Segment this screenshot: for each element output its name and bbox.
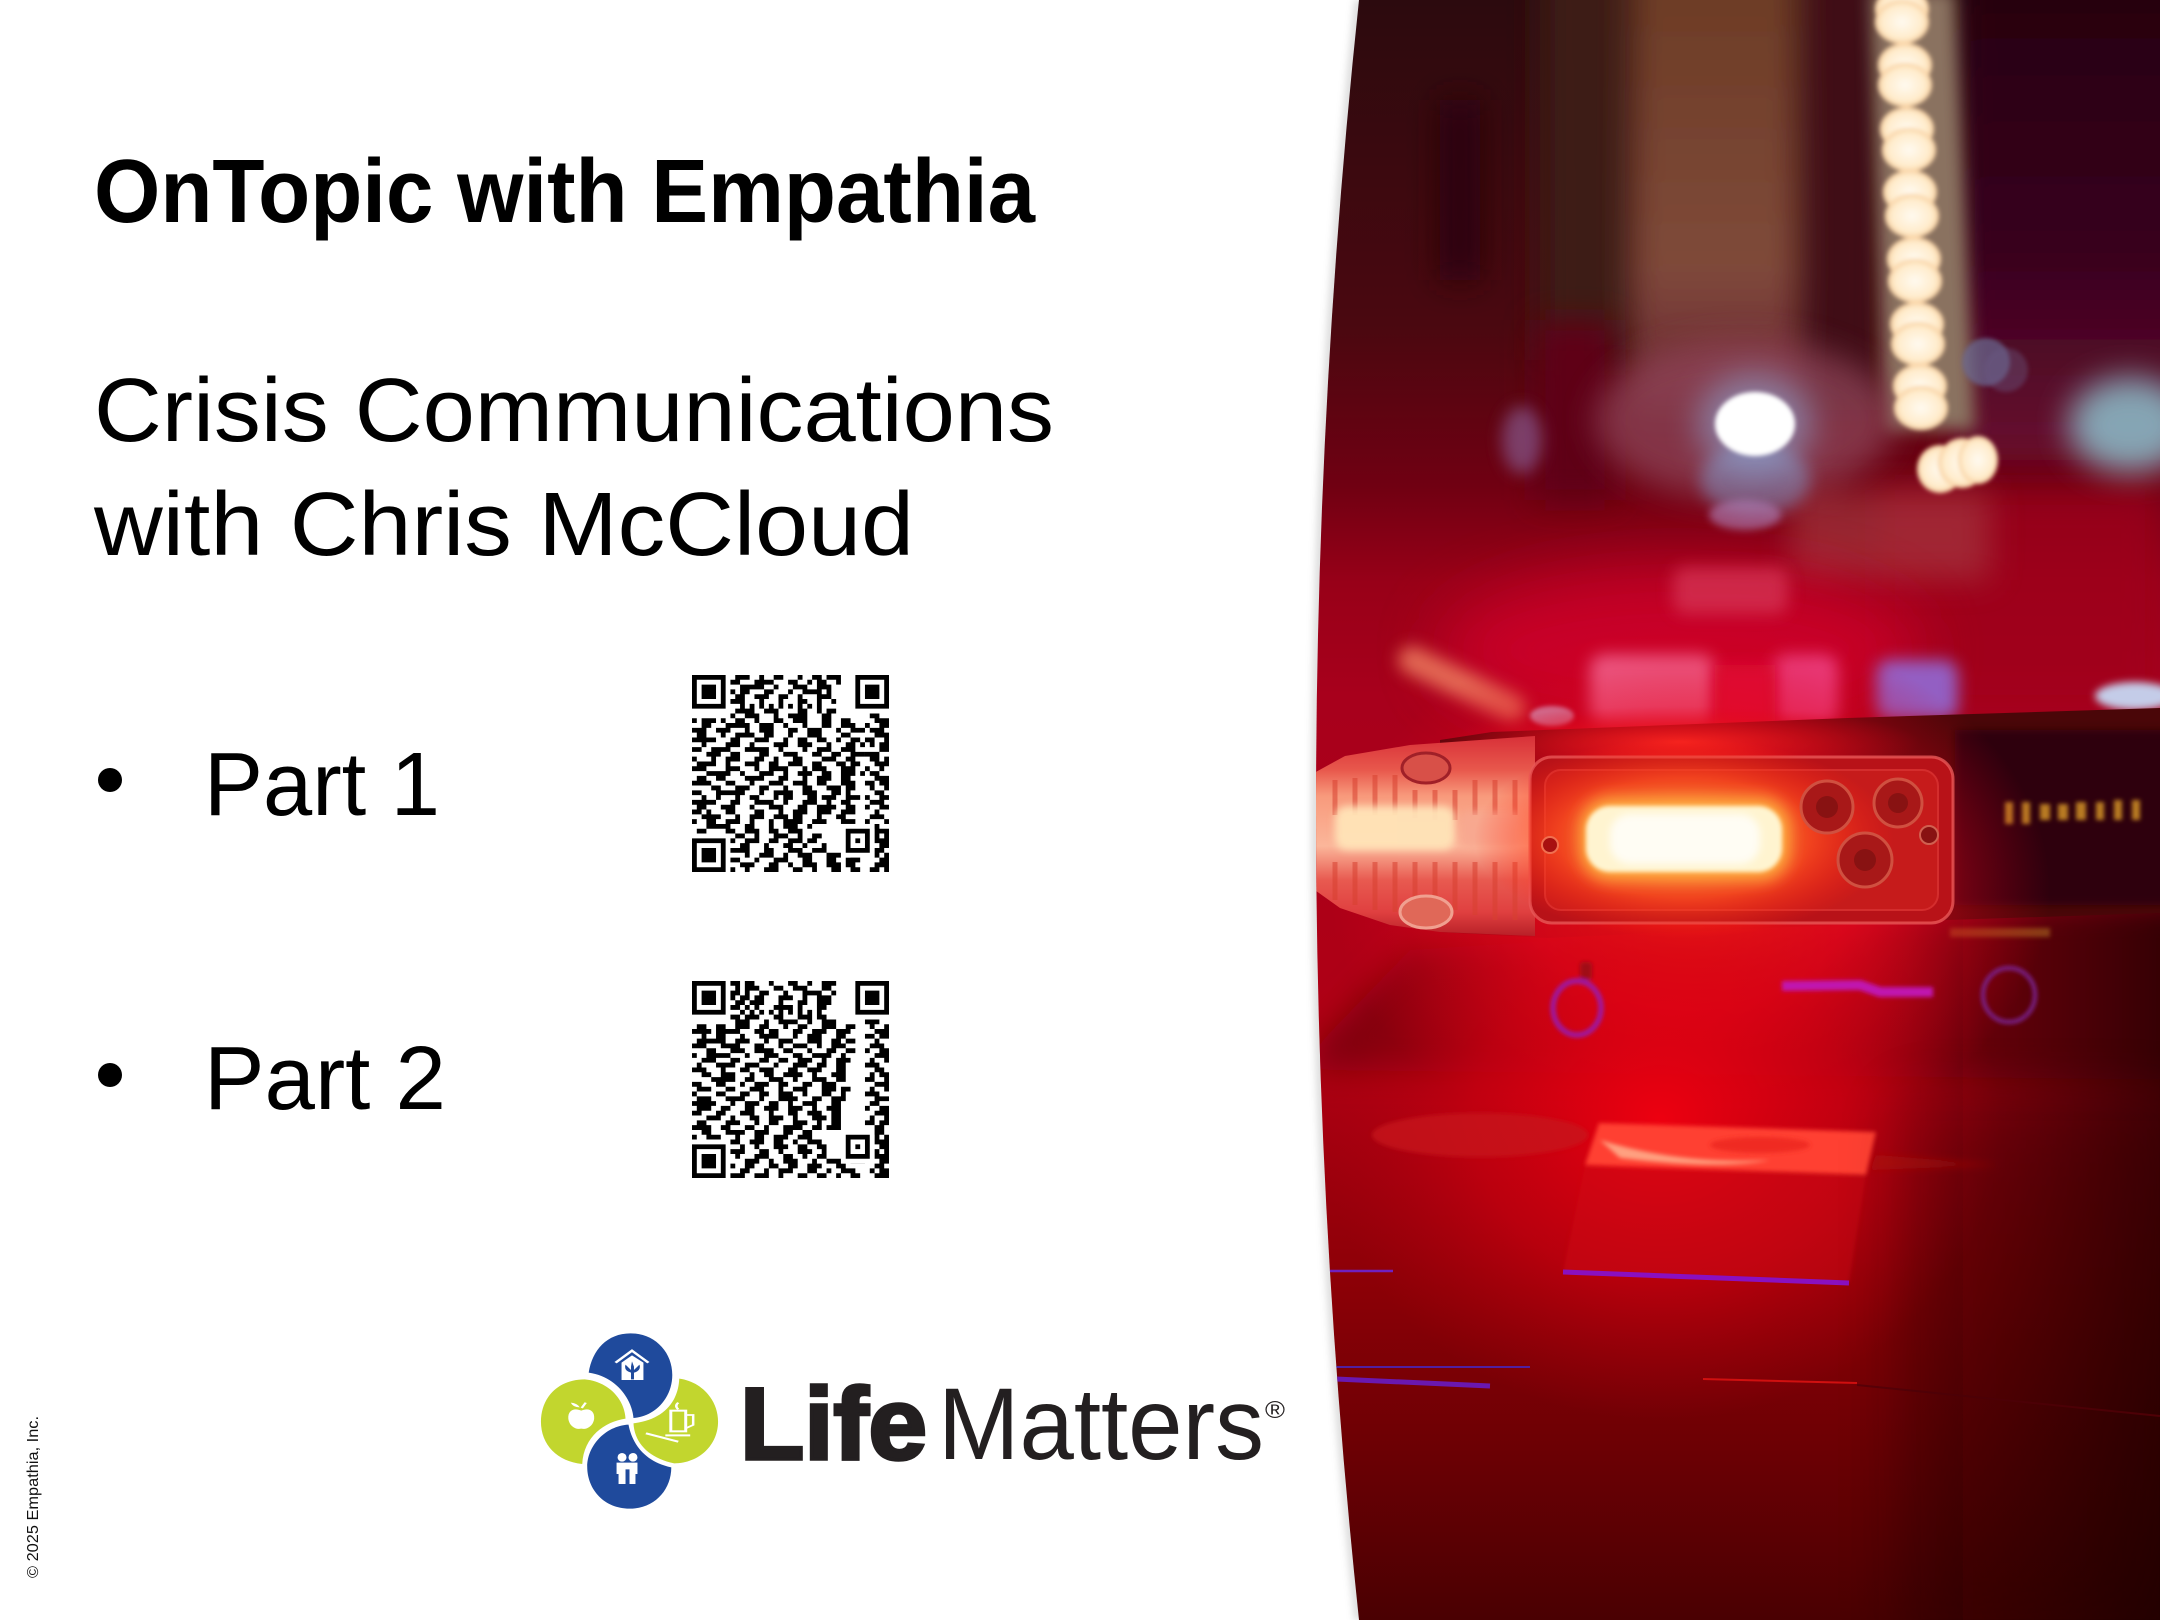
list item: Part 1 [98,735,440,835]
photo: police light bar at night [1270,0,2160,1620]
icon: house [616,1351,648,1380]
purple bolts [1553,962,2035,1035]
list item: Part 1: Part 1 [204,735,440,835]
reflective strip [1372,1113,2000,1283]
logo wordmark: ® [1265,1397,1285,1424]
logo wordmark [740,1367,1285,1481]
title: OnTopic with Empathia [94,142,1036,242]
red glow [1370,651,2038,1391]
purple reflection lines [1327,1271,2160,1416]
hot LED core [1580,798,1790,880]
blue and white lights [1502,338,2160,530]
logo wordmark: Life [740,1367,927,1481]
amber reflections [1950,800,2140,937]
logo wordmark: Matters [938,1367,1264,1481]
clear lens end [1312,736,1535,936]
light bar housing [1440,708,2160,938]
list item: Part 2 [98,1029,446,1129]
icon: coffee cup [646,1403,693,1442]
logo mark: four leaves [541,1333,718,1509]
subtitle [93,361,1054,575]
icon: apple [568,1403,594,1429]
QR code: Part 1 [692,675,889,872]
copyright: © 2025 Empathia, Inc. [25,1416,42,1578]
logo: LifeMatters [541,1333,1285,1509]
bottom vignette [1900,1100,2160,1620]
subtitle: with Chris McCloud [93,475,914,575]
blurred pink and orange lights [1412,567,2160,726]
main lens [1481,753,1954,924]
lower vehicle body [1316,900,2160,1620]
list item: Part 2: Part 2 [204,1029,446,1129]
bokeh lights column [1875,0,1998,493]
QR code: Part 2 [692,981,889,1178]
curve shadow [1316,0,1359,1620]
subtitle: Crisis Communications [94,361,1054,461]
blurred background buildings [1440,0,2160,730]
icon: two people [617,1453,637,1484]
